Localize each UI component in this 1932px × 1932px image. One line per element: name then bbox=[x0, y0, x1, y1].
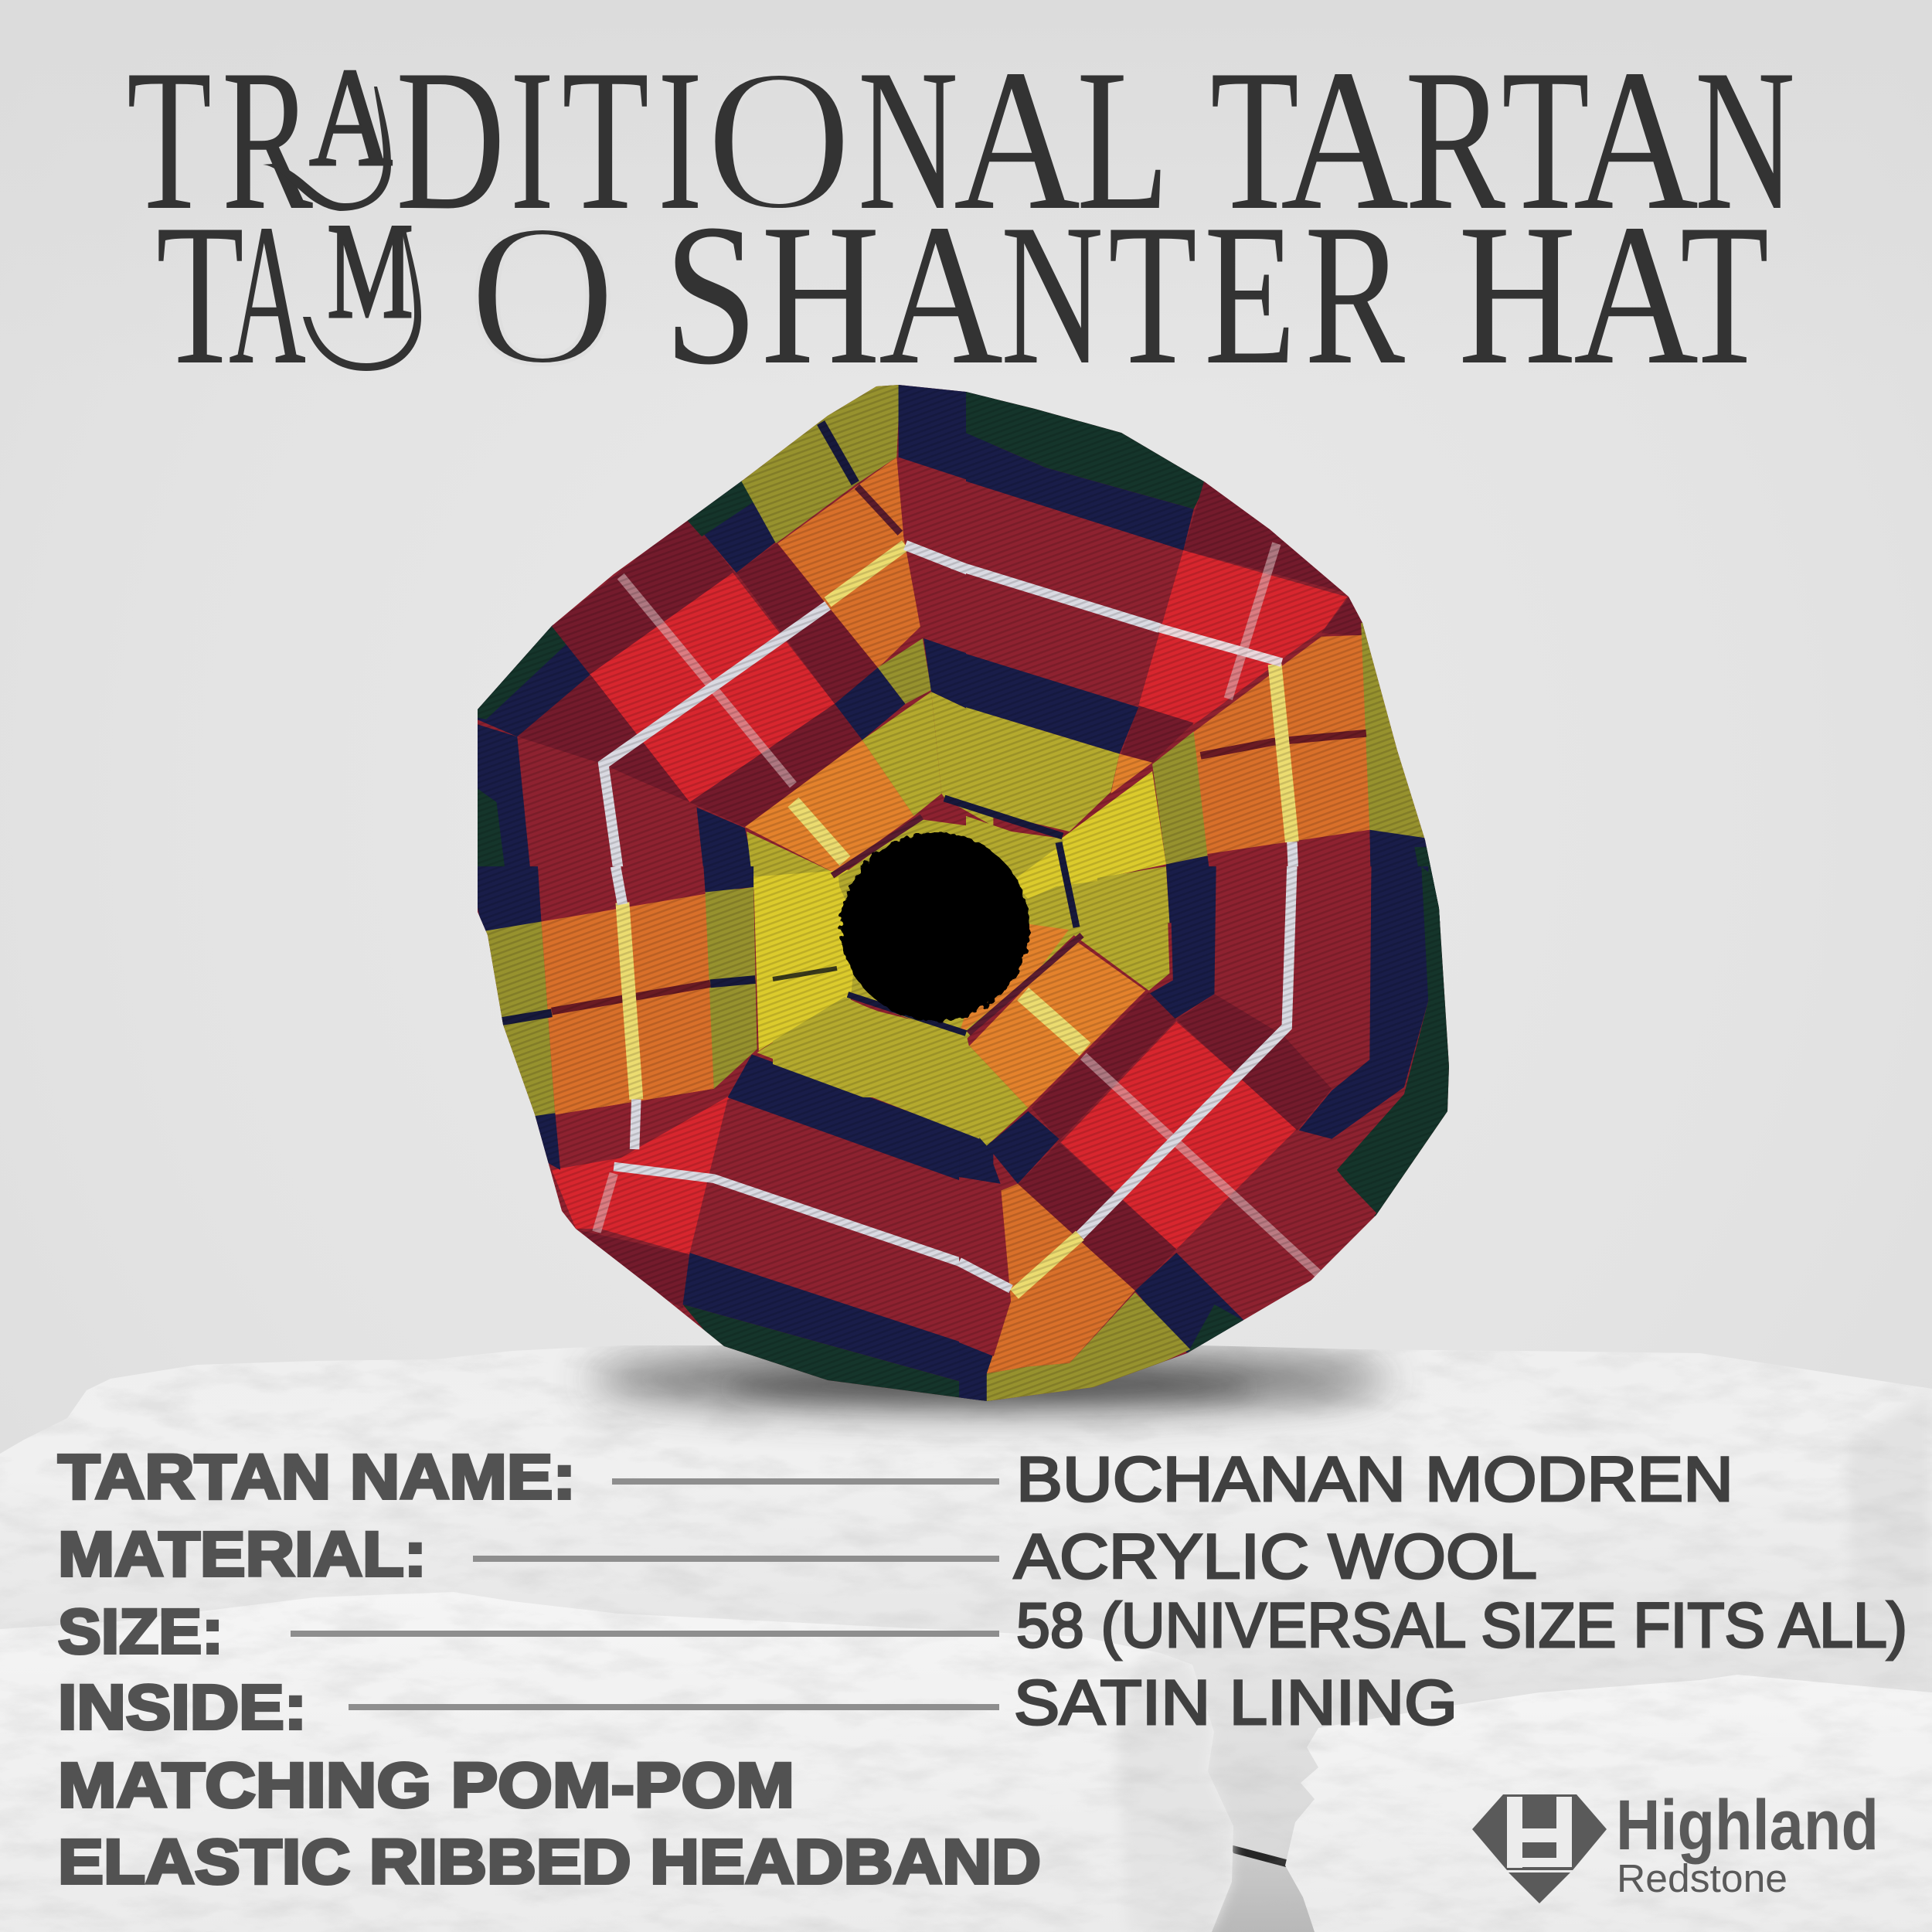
stone podium bbox=[0, 1342, 1932, 1932]
hat centre around pom-pom bbox=[773, 798, 1097, 1097]
title line 2: H bbox=[761, 182, 880, 406]
title line 1: O bbox=[705, 28, 853, 252]
spec list bbox=[58, 1442, 1907, 1897]
feature: pom-pom: MATCHING POM-POM bbox=[58, 1750, 794, 1821]
logo wordmark: Highland: Highland bbox=[1616, 1786, 1879, 1865]
title line 2: A bbox=[1573, 182, 1699, 406]
title line 1: A bbox=[1281, 28, 1409, 252]
hat quadrant: top left bbox=[469, 381, 993, 923]
title line 1: R bbox=[1405, 28, 1506, 252]
row: tartan name bbox=[58, 1442, 1733, 1515]
title line 1: N bbox=[1695, 28, 1795, 252]
hat quadrant: bottom right bbox=[959, 866, 1456, 1411]
title swash: R into A bbox=[263, 87, 391, 211]
title line 2: T bbox=[1108, 182, 1197, 406]
title line 1: L bbox=[1077, 28, 1164, 252]
title line 1: I bbox=[658, 28, 702, 252]
row: tartan name: BUCHANAN MODREN bbox=[1016, 1444, 1733, 1515]
title line 2: A bbox=[879, 182, 1003, 406]
title line 2: T bbox=[156, 182, 244, 406]
row: size: SIZE: bbox=[58, 1597, 223, 1667]
title swash: A into M bbox=[303, 226, 421, 371]
title line 2: R bbox=[1304, 182, 1406, 406]
row: inside bbox=[58, 1668, 1458, 1743]
title line 2: S bbox=[664, 182, 758, 406]
rock: left block side face bbox=[1117, 1653, 1233, 1932]
hat quadrant: bottom left bbox=[469, 866, 993, 1411]
title line 2: T bbox=[1680, 182, 1769, 406]
twill weave overlay bbox=[464, 371, 1468, 1414]
title line 1: T bbox=[127, 28, 212, 252]
row: material bbox=[58, 1519, 1537, 1592]
title line 2: O bbox=[468, 182, 617, 406]
title line 1: T bbox=[1210, 28, 1299, 252]
title line 2: E bbox=[1204, 182, 1296, 406]
row: size bbox=[58, 1590, 1907, 1667]
title line 1: A bbox=[309, 39, 393, 196]
floor gap between rocks bbox=[1198, 1839, 1329, 1932]
rock: main block bbox=[0, 1345, 1932, 1862]
title line 1: D bbox=[396, 28, 505, 252]
row: inside: SATIN LINING bbox=[1014, 1668, 1458, 1738]
title bbox=[127, 28, 1795, 406]
logo icon bbox=[1472, 1794, 1607, 1903]
rock: front left block bbox=[0, 1592, 1233, 1932]
row: tartan name: TARTAN NAME: bbox=[58, 1442, 576, 1512]
hat quadrant: top right bbox=[952, 385, 1456, 923]
logo bbox=[1472, 1786, 1879, 1903]
title line 2: A bbox=[229, 182, 306, 406]
tartan hat bbox=[464, 371, 1468, 1414]
hat base bbox=[464, 371, 1468, 1414]
title line 1: A bbox=[954, 28, 1080, 252]
title line 1: I bbox=[510, 28, 554, 252]
hat shadow on rock bbox=[587, 1349, 1391, 1410]
title line 1: N bbox=[858, 28, 958, 252]
row: size: 58 (UNIVERSAL SIZE FITS ALL) bbox=[1016, 1590, 1907, 1661]
row: material: MATERIAL: bbox=[58, 1519, 427, 1590]
title line 1: T bbox=[562, 28, 649, 252]
row: material: ACRYLIC WOOL bbox=[1014, 1522, 1537, 1592]
row: inside: INSIDE: bbox=[58, 1672, 307, 1743]
rock texture bbox=[0, 1342, 1932, 1932]
title line 2: H bbox=[1458, 182, 1577, 406]
rock: right side face bbox=[1847, 1391, 1932, 1696]
title line 1: R bbox=[222, 28, 314, 252]
logo wordmark: Redstone: Redstone bbox=[1617, 1856, 1787, 1900]
title line 1: A bbox=[1573, 28, 1699, 252]
contact shadow in gap bbox=[1230, 1845, 1289, 1867]
rock: front right block bbox=[1285, 1675, 1932, 1932]
feature: headband: ELASTIC RIBBED HEADBAND bbox=[58, 1827, 1041, 1897]
black pom-pom bbox=[841, 832, 1029, 1021]
title line 2: N bbox=[1001, 182, 1104, 406]
title line 1: T bbox=[1502, 28, 1590, 252]
title line 2: M bbox=[327, 194, 413, 347]
